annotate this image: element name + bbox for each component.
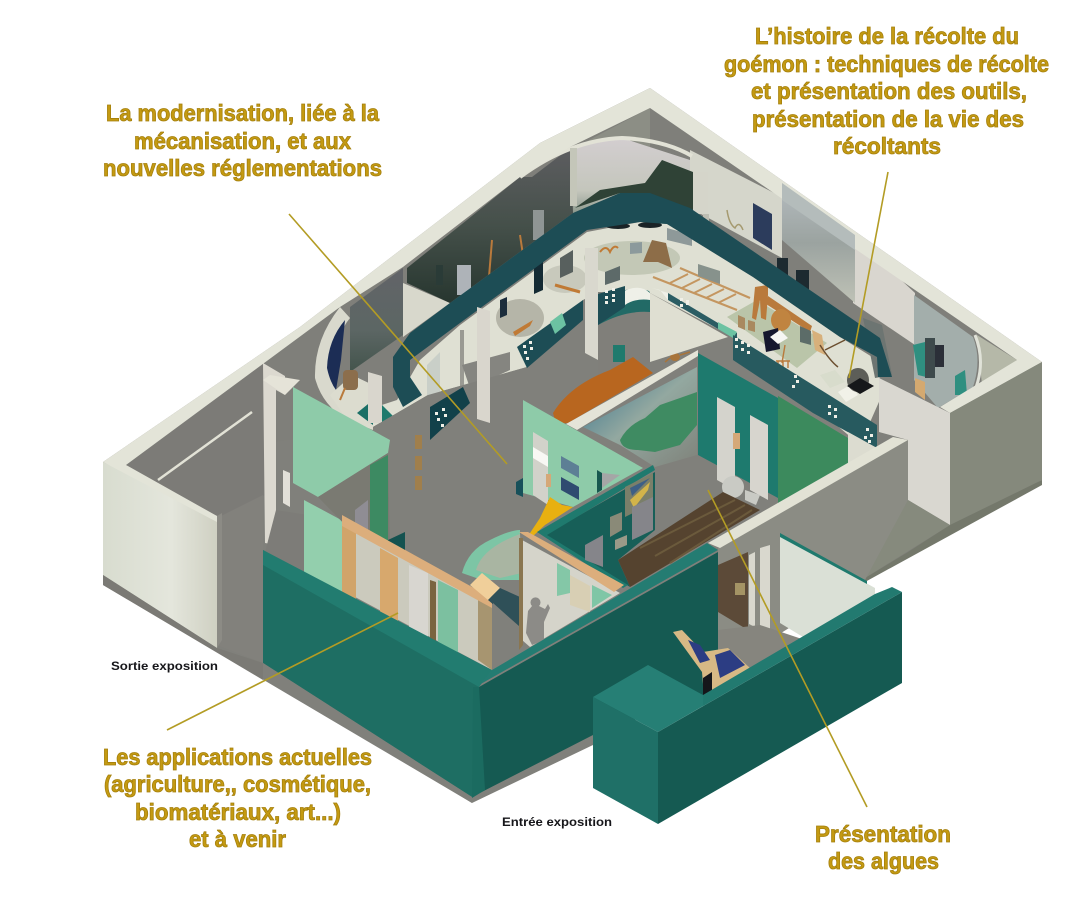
- dark blue overhead band: [393, 193, 892, 407]
- floor base: [103, 88, 1042, 803]
- callout: seaweed presentation: [815, 821, 951, 874]
- teal outer walls: [263, 543, 718, 803]
- left wing light wall: [103, 462, 263, 680]
- wall panels with dot grids: [430, 286, 877, 448]
- orange boat: [553, 357, 653, 424]
- callout: seaweed presentation: des algues: [828, 848, 939, 874]
- callout: seaweed presentation: Présentation: [815, 821, 951, 847]
- callout: current applications: (agriculture,, cosmétique,: [104, 771, 371, 797]
- mint exit room walls: [293, 387, 422, 640]
- callout: current applications: Les applications actuelles: [103, 744, 372, 770]
- entrance room: [704, 437, 908, 680]
- back walls and panoramas: [126, 108, 1017, 465]
- seaweed wall painting with tree: [566, 350, 698, 467]
- leader line: history: [849, 172, 888, 378]
- callout: modernisation: mécanisation, et aux: [134, 128, 351, 154]
- group of figures behind band: [777, 258, 809, 292]
- right wing walls: [865, 362, 1042, 582]
- gallery end photo with figures: [913, 295, 1017, 408]
- wood frame wall with shelves: [342, 515, 492, 670]
- label: entrance: Entrée exposition: [502, 815, 612, 829]
- label: exit: Sortie exposition: [111, 659, 218, 673]
- brown slatted wall: [618, 492, 760, 587]
- callout: modernisation: La modernisation, liée à la: [106, 100, 379, 126]
- light gallery floor: [357, 222, 882, 445]
- callout: history of harvesting: goémon : techniques de récolte: [724, 51, 1049, 77]
- callout: history of harvesting: [724, 23, 1049, 159]
- leader line: applications: [167, 613, 398, 730]
- objects and carpets in gallery: [340, 222, 874, 402]
- yellow shape: [530, 497, 573, 537]
- leader line: modernisation: [289, 214, 507, 464]
- teal display room with doors: [698, 353, 893, 505]
- callout: current applications: biomatériaux, art...): [135, 799, 341, 825]
- callout: modernisation: [103, 100, 382, 181]
- callout: current applications: [103, 744, 372, 852]
- leader line: seaweed: [708, 490, 867, 807]
- callout: history of harvesting: et présentation des outils,: [751, 78, 1027, 104]
- callout: history of harvesting: L’histoire de la récolte du: [755, 23, 1019, 49]
- large photo on right wall: [782, 183, 855, 303]
- gray left wing and pillars: [126, 362, 345, 663]
- central gray walls: [368, 248, 728, 603]
- artwork in entrance: [673, 630, 750, 696]
- central teal room corner: [537, 465, 655, 588]
- photo overlapping top of right wall: [782, 183, 855, 250]
- callout: history of harvesting: récoltants: [833, 133, 941, 159]
- illustration: isometric exhibition floor plan: [103, 88, 1042, 824]
- callout: history of harvesting: présentation de la vie des: [752, 106, 1024, 132]
- callout: modernisation: nouvelles réglementations: [103, 155, 382, 181]
- entrance block: [593, 587, 902, 824]
- callout: current applications: et à venir: [189, 826, 286, 852]
- outer wall cap: [103, 88, 1042, 522]
- display table and figure room: [462, 530, 624, 668]
- mint panel with door and photos: [516, 400, 643, 507]
